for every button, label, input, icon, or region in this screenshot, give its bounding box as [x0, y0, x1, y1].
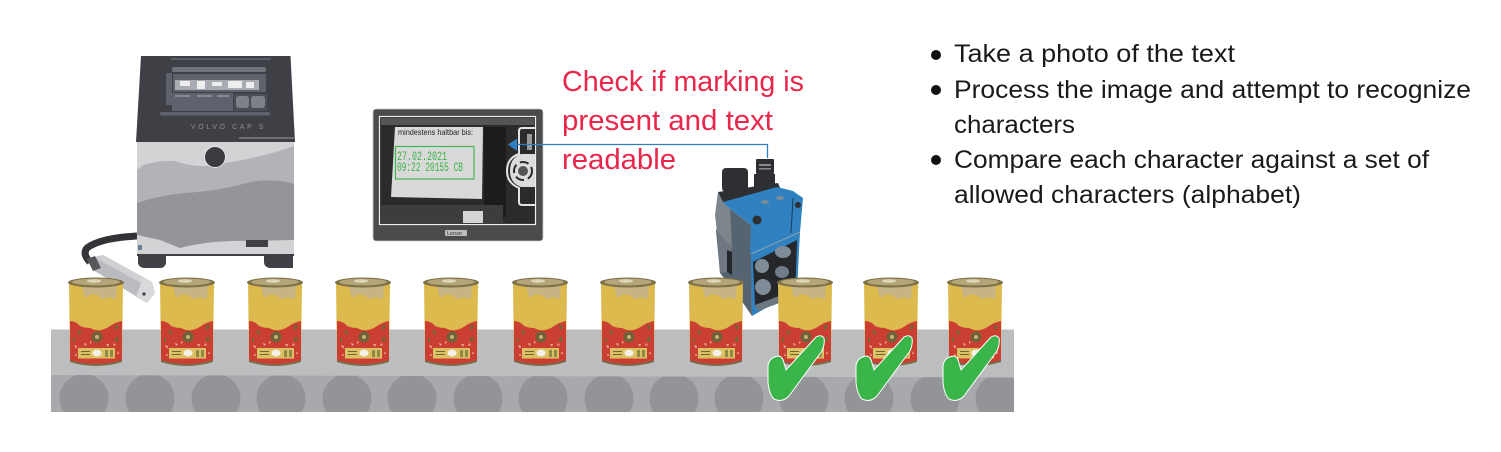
camera connection arrow [508, 138, 768, 158]
OCR result box [396, 146, 474, 179]
process steps list: Compare each character against a set of [954, 146, 1429, 174]
red callout: present and text [562, 105, 773, 137]
printer hose [85, 236, 137, 262]
camera top plate [718, 183, 781, 203]
printer touch screen [160, 67, 270, 116]
camera left side [716, 207, 752, 316]
process steps list: allowed characters (alphabet) [954, 181, 1301, 209]
process steps list [931, 40, 1471, 209]
monitor screen [380, 116, 536, 224]
conveyor belt [51, 330, 1014, 412]
red callout: readable [562, 144, 676, 176]
label text: mindestens haltbar bis: [398, 127, 473, 137]
printer body [137, 142, 294, 256]
row of tomato cans [68, 278, 1003, 366]
camera lens window [753, 240, 797, 311]
control overlay [507, 128, 535, 205]
camera connectors [722, 159, 775, 192]
process steps list: characters [954, 111, 1075, 139]
printer brand text: VOLVO CAP S [191, 124, 266, 131]
red callout: Check if marking is [562, 66, 804, 98]
process steps list: Take a photo of the text [954, 40, 1235, 68]
red callout [562, 66, 804, 176]
printer head housing [136, 56, 295, 142]
green check marks [768, 336, 999, 400]
monitor logo badge: Lenze [447, 231, 462, 237]
OCR result box: 09:22 20155 CB [397, 160, 463, 175]
printer feet [138, 256, 293, 268]
OCR result box: 27.02.2021 [397, 149, 447, 164]
printer start button [204, 146, 226, 168]
print head [87, 255, 155, 303]
inkjet printer [85, 56, 295, 303]
process steps list: Process the image and attempt to recognize [954, 76, 1471, 104]
vision camera [715, 159, 803, 316]
label on product [391, 127, 483, 199]
monitor logo badge [445, 230, 467, 237]
vision system monitor [373, 109, 543, 241]
camera blue body [723, 187, 803, 254]
